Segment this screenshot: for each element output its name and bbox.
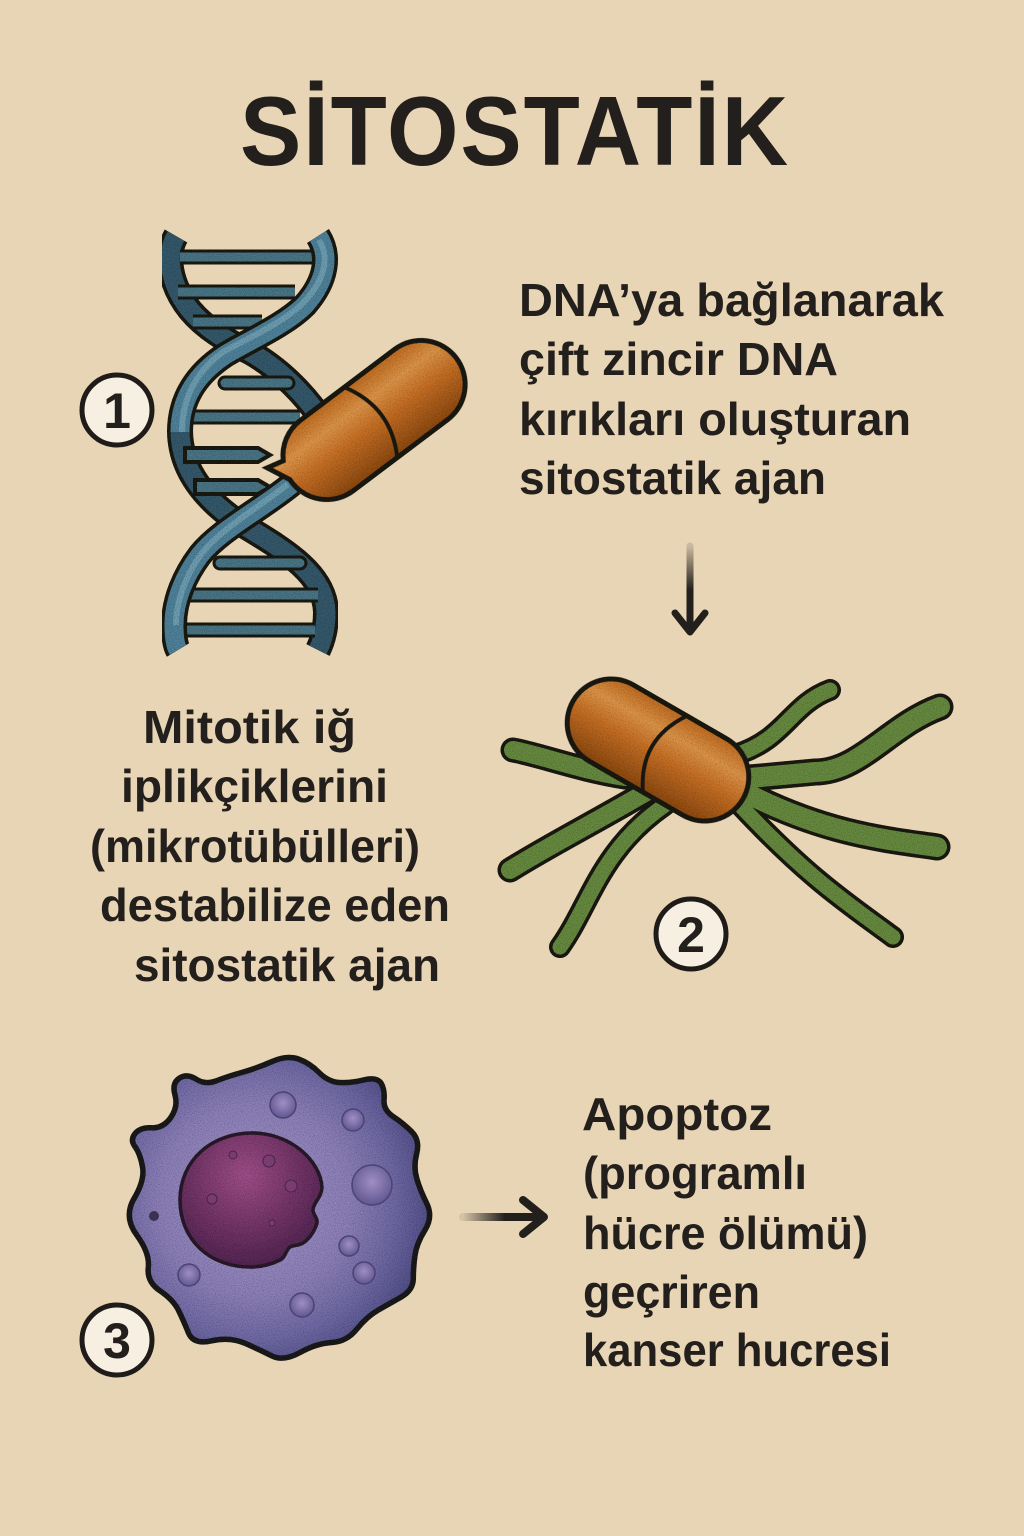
- text: step 3 description: Apoptoz: [582, 1088, 772, 1140]
- text: step 1 description: sitostatik ajan: [519, 452, 826, 504]
- text: step 2 description: [90, 701, 450, 991]
- broken rung tips: [185, 448, 270, 494]
- cell body: [129, 1058, 430, 1358]
- microtubules: [510, 690, 940, 947]
- capsule: [551, 663, 765, 837]
- capsule body with notch: [256, 323, 483, 524]
- DNA helix: [170, 236, 330, 650]
- illustration 1: DNA double helix with capsule: [170, 236, 483, 650]
- illustration 2: capsule on microtubules: [510, 663, 940, 947]
- text: step 1 description: çift zincir DNA: [519, 333, 838, 385]
- text: step 3 description: kanser hucresi: [583, 1324, 891, 1376]
- base pair rungs: [178, 257, 318, 630]
- text: step 2 description: iplikçiklerini: [121, 760, 388, 812]
- number badge 1: 1: [103, 383, 131, 439]
- vesicles: [178, 1092, 392, 1317]
- title: SİTOSTATİK: [240, 76, 790, 186]
- nucleolus spots: [207, 1151, 297, 1226]
- front strand segments: [174, 236, 325, 650]
- number badge 3: 3: [103, 1313, 131, 1369]
- back strand segments: [170, 236, 330, 650]
- text: step 1 description: [519, 274, 944, 504]
- text: step 1 description: kırıkları oluşturan: [519, 393, 911, 445]
- text: step 1 description: DNA’ya bağlanarak: [519, 274, 944, 326]
- number badge 2: [656, 899, 726, 969]
- text: step 3 description: geçriren: [583, 1266, 760, 1318]
- text: step 2 description: sitostatik ajan: [134, 939, 440, 991]
- text: step 3 description: [582, 1088, 891, 1376]
- arrow: down: [675, 546, 705, 632]
- text: step 2 description: Mitotik iğ: [143, 701, 356, 753]
- dark granule: [149, 1211, 159, 1221]
- text: step 3 description: (programlı: [583, 1147, 807, 1199]
- illustration 3: apoptotic cancer cell: [129, 1058, 430, 1358]
- capsule: [256, 323, 483, 524]
- text: step 2 description: (mikrotübülleri): [90, 820, 420, 872]
- text: step 2 description: destabilize eden: [100, 879, 450, 931]
- arrow: right: [463, 1200, 544, 1234]
- text: step 3 description: hücre ölümü): [583, 1207, 868, 1259]
- number badge 3: [82, 1305, 152, 1375]
- nucleus: [180, 1133, 322, 1267]
- capsule seam: [344, 379, 408, 458]
- number badge 1: [82, 375, 152, 445]
- number badge 2: 2: [677, 907, 705, 963]
